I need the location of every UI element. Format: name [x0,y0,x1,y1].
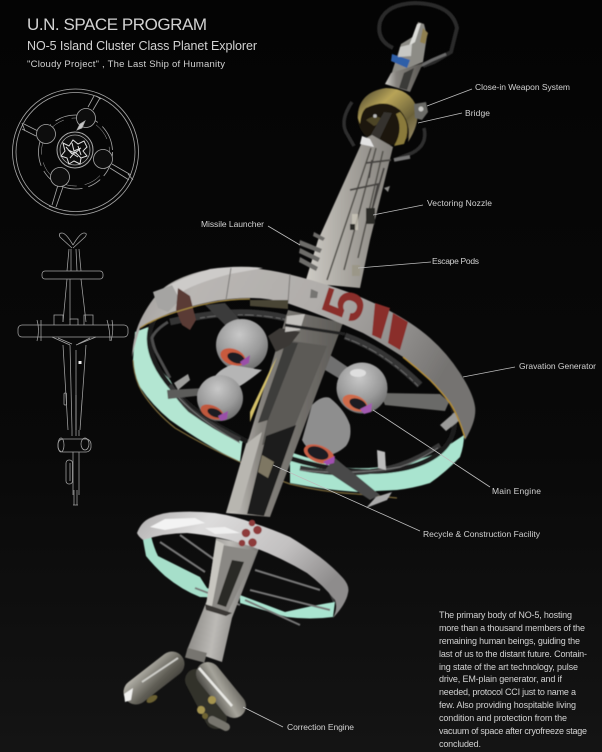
description paragraph: condition and protection from the [439,713,567,723]
description paragraph: drive, EM-plain generator, and if [439,674,562,684]
main ring: white upper band [132,267,475,440]
wireframe: side view [18,233,128,505]
spacecraft illustration [124,3,479,727]
recycle and construction facility [258,455,274,478]
label: recycle and construction facility: Recycle & Construction Facility [423,529,541,539]
forward ring (dark, behind nose) [379,3,457,66]
subtitle: NO-5 Island Cluster Class Planet Explorer [27,39,257,53]
label: main engine: Main Engine [492,486,541,496]
description paragraph [439,610,587,749]
description paragraph: more than a thousand members of the [439,623,585,633]
heading block [27,15,257,70]
description paragraph: remaining human beings, guiding the [439,636,580,646]
main ring: rear inner band [125,252,479,508]
label: escape pods: Escape Pods [432,256,479,266]
description paragraph: ing state of the art technology, pulse [439,662,578,672]
mint panel bottom [290,435,464,492]
label: missile launcher: Missile Launcher [201,219,264,229]
nose section [385,22,428,92]
label: gravation generator: Gravation Generator [519,361,596,371]
bridge outrigger ring (dark) [344,102,425,160]
missile launcher [299,232,325,271]
description paragraph: few. Also providing hospitable living [439,700,576,710]
close-in weapon system turret [414,102,428,120]
red dots [239,520,262,547]
description paragraph: concluded. [439,739,481,749]
inner dark structure [125,252,479,508]
label: correction engine: Correction Engine [287,722,354,732]
bridge ring [351,82,428,155]
engine sphere 4 [301,397,350,467]
stern ring: rear [143,535,335,625]
ring numeral 5: 5 [309,280,378,329]
tagline: "Cloudy Project" , The Last Ship of Humanity [27,59,225,70]
label: bridge: Bridge [465,108,490,118]
right nozzle [196,668,234,727]
aft hull [187,538,260,662]
correction engine [124,648,234,727]
label: close-in weapon system: Close-in Weapon System [475,82,570,92]
callout labels [201,82,596,732]
wireframe: top view [12,89,138,215]
upper hull [305,135,393,288]
engine sphere 1 [216,319,268,371]
engine sphere 3 [336,362,388,415]
radial struts [167,303,460,508]
escape pods [352,265,360,276]
label: vectoring nozzle: Vectoring Nozzle [427,198,492,208]
left nozzle [124,658,178,705]
vectoring nozzle [366,208,375,224]
red stripes [372,303,408,350]
description paragraph: needed, protocol CCI just to name a [439,687,576,697]
description paragraph: The primary body of NO-5, hosting [439,610,572,620]
stern ring: white band [137,512,348,618]
description paragraph: last of us to the distant future. Contain- [439,649,587,659]
main engine spheres [197,319,388,467]
title: U.N. SPACE PROGRAM [27,15,207,34]
callout lines [243,89,515,727]
hub [57,132,93,168]
mint panel left [133,327,243,462]
engine sphere 2 [197,375,243,423]
description paragraph: vacuum of space after cryofreeze stage [439,726,587,736]
central hull [226,310,345,517]
